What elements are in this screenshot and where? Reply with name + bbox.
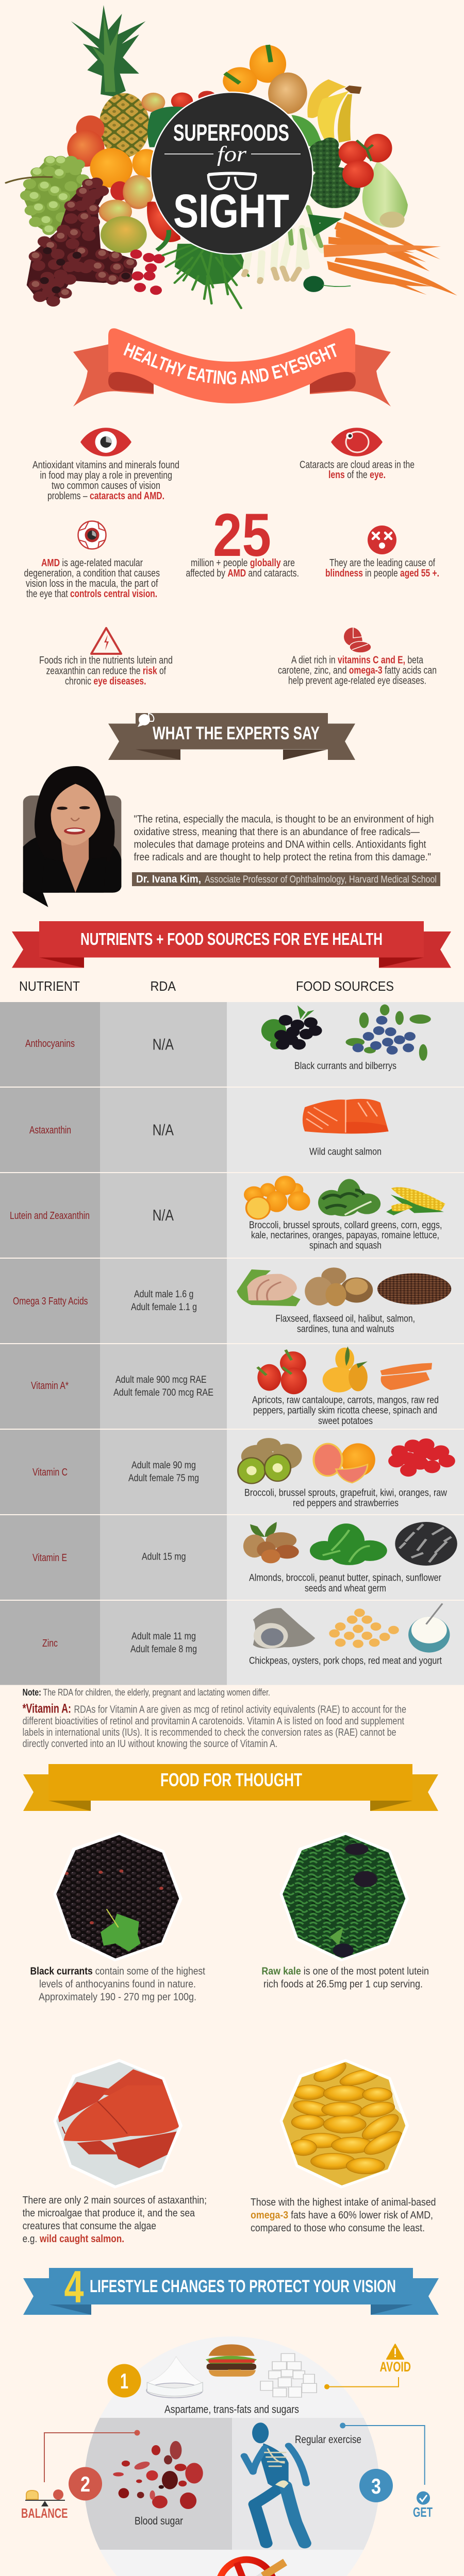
RDA values: Adult male 11 mg bbox=[131, 1631, 196, 1642]
ribbon left fold bbox=[108, 372, 154, 393]
text: omega-3: Those with the highest intake of animal-based bbox=[251, 2197, 436, 2208]
carrots bbox=[323, 212, 457, 296]
icon: check bbox=[417, 2492, 430, 2505]
row: vitamin E bbox=[32, 1522, 457, 1594]
quote text: "The retina, especially the macula, is thought to be an environment of high bbox=[134, 814, 434, 825]
banner folds bbox=[49, 2304, 413, 2315]
banner folds bbox=[136, 749, 328, 760]
label: avoid: AVOID bbox=[379, 2359, 411, 2375]
row: astaxanthin bbox=[29, 1099, 389, 1157]
food caption: Black currants and bilberrys bbox=[294, 1060, 396, 1072]
section 2: balance bbox=[21, 2430, 203, 2527]
text: black currants: levels of anthocyanins found in nature. bbox=[39, 1979, 196, 1990]
food images: oranges, kale, corn bbox=[244, 1176, 445, 1219]
icon: warning triangle bbox=[91, 628, 121, 654]
note: vitamin A: *Vitamin A: bbox=[23, 1701, 71, 1716]
text: global stat bbox=[186, 557, 299, 579]
text: lutein: chronic eye diseases. bbox=[65, 676, 146, 687]
banner folds bbox=[39, 957, 424, 968]
connector bbox=[44, 2430, 140, 2482]
text: AMD: AMD is age-related macular bbox=[41, 557, 143, 569]
RDA value: N/A bbox=[153, 1036, 174, 1053]
text: antioxidants: two common causes of vision bbox=[52, 480, 160, 492]
food caption: seeds and wheat germ bbox=[305, 1583, 386, 1594]
text: salmon: e.g. wild caught salmon. bbox=[23, 2233, 124, 2245]
text: AMD: the eye that controls central vision. bbox=[26, 588, 157, 600]
RDA values: Adult male 1.6 g bbox=[134, 1289, 193, 1300]
text: AMD: vision loss in the macula, the part of bbox=[26, 578, 158, 589]
jacket bbox=[23, 836, 121, 893]
nutrient name: Omega 3 Fatty Acids bbox=[13, 1296, 88, 1307]
middle band bbox=[82, 2418, 382, 2550]
caption: Regular exercise bbox=[295, 2434, 361, 2446]
quote text: free radicals and are thought to help protect the retina from this damage." bbox=[134, 852, 431, 863]
lifestyle circle diagram bbox=[21, 2336, 433, 2576]
pineapple bbox=[71, 5, 150, 158]
attribution box bbox=[132, 872, 440, 886]
panel: omega-3 capsules bbox=[251, 2057, 436, 2234]
banner main bar bbox=[136, 713, 328, 760]
mango and red fruit bbox=[67, 115, 105, 167]
number 1 bbox=[107, 2364, 141, 2398]
caption: Blood sugar bbox=[135, 2515, 183, 2527]
icon: pills bbox=[344, 628, 371, 653]
spinach leaf bbox=[303, 276, 351, 292]
title badge bbox=[151, 92, 312, 254]
text: salmon: the microalgae that produce it, and the sea bbox=[23, 2208, 195, 2219]
banner: food for thought bbox=[23, 1764, 438, 1811]
food caption bbox=[244, 1487, 448, 1509]
text: cataracts: lens of the eye. bbox=[328, 469, 386, 481]
food image: salmon bbox=[303, 1099, 389, 1133]
image: running figure bbox=[244, 2422, 306, 2544]
apples behind bbox=[141, 91, 216, 112]
row: lutein and zeaxanthin bbox=[10, 1176, 445, 1251]
pear bbox=[101, 216, 147, 253]
attribution name: Dr. Ivana Kim, bbox=[136, 873, 201, 885]
image: burger bbox=[206, 2344, 257, 2377]
panel: lutein bbox=[39, 628, 173, 687]
photo: salmon bbox=[53, 2059, 184, 2189]
icon: bloodshot eye bbox=[78, 521, 106, 549]
notes bbox=[23, 1687, 406, 1750]
expert quote bbox=[132, 814, 440, 886]
panel: salmon bbox=[23, 2059, 207, 2245]
table header: food sources: FOOD SOURCES bbox=[296, 978, 394, 994]
onion bbox=[268, 73, 307, 114]
hero: pile of fruit and vegetables bbox=[6, 5, 457, 308]
panel: AMD bbox=[24, 521, 160, 600]
photo: kale bbox=[279, 1832, 410, 1961]
icon: balance scale bbox=[25, 2489, 65, 2506]
speech tail bbox=[23, 882, 59, 907]
nutrient name: Vitamin C bbox=[32, 1467, 68, 1478]
nutrient name: Vitamin A* bbox=[31, 1380, 69, 1392]
photo: black currants bbox=[53, 1832, 184, 1961]
RDA values: Adult female 75 mg bbox=[128, 1472, 199, 1484]
text: black currants: Black currants contain some of the highest bbox=[30, 1966, 205, 1977]
table header: RDA: RDA bbox=[151, 978, 176, 994]
number 2 bbox=[69, 2467, 102, 2501]
note: vitamin A bbox=[23, 1701, 406, 1750]
text: diet: help prevent age-related eye diseases. bbox=[288, 675, 426, 686]
image: aspartame bowl bbox=[146, 2357, 203, 2398]
connector bbox=[324, 2377, 399, 2389]
banner tails bbox=[108, 723, 355, 760]
food caption bbox=[249, 1219, 442, 1251]
text: blindness: They are the leading cause of bbox=[329, 557, 435, 569]
banner: 4 lifestyle changes bbox=[23, 2261, 439, 2315]
banner: nutrients and food sources bbox=[12, 921, 451, 968]
text: global stat: affected by AMD and cataracts. bbox=[186, 568, 299, 579]
photo: capsules bbox=[279, 2057, 410, 2189]
text: raw kale bbox=[261, 1966, 429, 1990]
eyes bbox=[57, 806, 90, 810]
title rule right bbox=[251, 154, 301, 155]
food caption: spinach and squash bbox=[309, 1240, 382, 1251]
food images: peppers, mangos, carrots bbox=[257, 1346, 432, 1394]
image: blood cells bbox=[113, 2441, 203, 2509]
food images: tuna, walnuts, flaxseed bbox=[237, 1267, 451, 1306]
quote text bbox=[134, 814, 434, 863]
text: diet: A diet rich in vitamins C and E, beta bbox=[291, 654, 424, 666]
text: raw kale: Raw kale is one of the most potent lutein bbox=[261, 1966, 429, 1977]
row: vitamin C bbox=[32, 1438, 448, 1509]
red bell pepper bbox=[147, 201, 180, 250]
panel: antioxidants bbox=[32, 428, 179, 502]
RDA values bbox=[131, 1289, 197, 1313]
ribbon right tail bbox=[310, 344, 391, 406]
food caption: sardines, tuna and walnuts bbox=[297, 1324, 394, 1335]
banner folds bbox=[48, 1801, 412, 1811]
panel: blindness bbox=[325, 526, 439, 579]
banner main bar bbox=[49, 2268, 413, 2304]
food caption: Flaxseed, flaxseed oil, halibut, salmon, bbox=[275, 1313, 415, 1325]
text: global stat: million + people globally are bbox=[191, 557, 295, 569]
RDA values: Adult male 90 mg bbox=[131, 1460, 196, 1471]
nutrient name: Lutein and Zeaxanthin bbox=[10, 1210, 90, 1222]
raspberries bbox=[136, 254, 159, 290]
RDA values bbox=[113, 1374, 213, 1398]
nutrient name: Zinc bbox=[42, 1638, 58, 1649]
text: AMD: degeneration, a condition that causes bbox=[24, 568, 160, 579]
section 4: quit smoking bbox=[89, 2560, 334, 2576]
text: antioxidants: problems – cataracts and AMD. bbox=[47, 490, 164, 502]
banner title: WHAT THE EXPERTS SAY bbox=[153, 723, 320, 743]
RDA values bbox=[130, 1631, 197, 1655]
red grapes bbox=[27, 179, 136, 303]
ribbon left tail bbox=[73, 344, 154, 406]
nose shadow bbox=[71, 818, 79, 821]
food images: currants and bilberries bbox=[261, 1005, 431, 1061]
table backgrounds bbox=[0, 1002, 464, 1685]
number 1: 1 bbox=[120, 2369, 128, 2393]
celery bbox=[362, 161, 408, 228]
icon: glasses bbox=[208, 173, 256, 189]
text: omega-3: compared to those who consume the least. bbox=[251, 2223, 425, 2234]
text: omega-3: omega-3 fats have a 60% lower risk of AMD, bbox=[251, 2210, 433, 2221]
panel: diet bbox=[278, 628, 437, 686]
ribbon: healthy eating and eyesight bbox=[73, 328, 391, 406]
text: lutein: Foods rich in the nutrients lutein and bbox=[39, 655, 173, 666]
RDA value: Adult 15 mg bbox=[142, 1551, 186, 1563]
title: superfoods: SUPERFOODS bbox=[173, 120, 289, 146]
ribbon title: HEALTHY EATING AND EYESIGHT bbox=[123, 343, 337, 384]
banner title: FOOD FOR THOUGHT bbox=[160, 1769, 302, 1790]
row: anthocyanins bbox=[25, 1005, 431, 1072]
section 1: avoid bbox=[107, 2344, 411, 2415]
ribbon main band bbox=[108, 328, 355, 403]
quote text: oxidative stress, meaning that there is an abundance of free radicals— bbox=[134, 826, 420, 838]
panel: black currants bbox=[30, 1832, 205, 2003]
broccoli bbox=[307, 138, 360, 208]
food images: kiwi, grapefruit, strawberries bbox=[238, 1438, 447, 1483]
collar bbox=[41, 857, 107, 893]
connector bbox=[340, 2422, 425, 2485]
title: for: for bbox=[217, 143, 247, 166]
text: diet: carotene, zinc, and omega-3 fatty acids can bbox=[278, 665, 437, 676]
stat: 25 million bbox=[186, 501, 299, 579]
neck bbox=[61, 836, 89, 893]
text: antioxidants bbox=[32, 460, 179, 502]
text: antioxidants: in food may play a role in preventing bbox=[40, 470, 172, 481]
RDA values bbox=[128, 1460, 199, 1484]
text: black currants: Approximately 190 - 270 mg per 100g. bbox=[39, 1992, 196, 2003]
icon: speech bubbles bbox=[138, 714, 154, 727]
icon: face bbox=[368, 526, 396, 554]
nutrient name: Anthocyanins bbox=[25, 1038, 75, 1049]
number 3 bbox=[359, 2469, 393, 2502]
text: cataracts: Cataracts are cloud areas in the bbox=[300, 460, 415, 471]
photo backdrop bbox=[23, 795, 121, 893]
face bbox=[51, 784, 101, 845]
food images: oyster, chickpeas, yogurt bbox=[253, 1603, 450, 1653]
spring onions bbox=[244, 207, 332, 282]
text: lutein: zeaxanthin can reduce the risk of bbox=[46, 666, 166, 677]
banner: what the experts say bbox=[108, 713, 355, 760]
icon: eye with lens bbox=[331, 428, 383, 456]
text: diet bbox=[278, 654, 437, 686]
banner main bar bbox=[48, 1764, 412, 1801]
icon: no smoking bbox=[211, 2560, 285, 2576]
food caption bbox=[275, 1313, 415, 1335]
text: blindness bbox=[325, 557, 439, 579]
RDA value: N/A bbox=[153, 1206, 174, 1224]
title: sight: SIGHT bbox=[173, 185, 289, 238]
badge circle bbox=[151, 92, 312, 254]
RDA value: N/A bbox=[153, 1121, 174, 1139]
RDA values: Adult male 900 mcg RAE bbox=[115, 1374, 207, 1385]
banner tails bbox=[23, 1774, 438, 1811]
icon: eye bbox=[80, 428, 131, 456]
spinach leaves bbox=[147, 107, 321, 147]
banner tails bbox=[23, 2278, 439, 2315]
banner tails bbox=[12, 931, 451, 968]
quote text: molecules that damage proteins and DNA within cells. Antioxidants fight bbox=[134, 839, 426, 850]
text: cataracts bbox=[300, 460, 415, 481]
number 3: 3 bbox=[371, 2474, 381, 2498]
tomatoes bbox=[339, 134, 392, 188]
text: antioxidants: Antioxidant vitamins and minerals found bbox=[32, 460, 179, 471]
food caption bbox=[249, 1572, 441, 1594]
text: salmon bbox=[23, 2195, 207, 2245]
ribbon right fold bbox=[310, 372, 356, 393]
note: vitamin A: directly converted into an IU without knowing the source of Vitamin A. bbox=[23, 1738, 277, 1750]
big number 25: 25 bbox=[213, 501, 271, 569]
number 2: 2 bbox=[80, 2472, 90, 2496]
oranges bbox=[90, 148, 161, 188]
table header: nutrient: NUTRIENT bbox=[19, 978, 80, 994]
text: raw kale: rich foods at 26.5mg per 1 cup serving. bbox=[263, 1979, 423, 1990]
text: blindness: blindness in people aged 55 +. bbox=[325, 568, 439, 579]
RDA values: Adult female 700 mcg RAE bbox=[113, 1387, 213, 1398]
big number 4: 4 bbox=[64, 2261, 84, 2312]
text: salmon: creatures that consume the algae bbox=[23, 2221, 156, 2232]
section 3: get exercise bbox=[244, 2422, 433, 2544]
apples in front bbox=[99, 175, 154, 224]
lettuce bbox=[291, 115, 322, 147]
nutrient name: Astaxanthin bbox=[29, 1125, 71, 1136]
hair bbox=[35, 766, 115, 861]
food caption: red peppers and strawberries bbox=[293, 1498, 399, 1509]
RDA values: Adult female 1.1 g bbox=[131, 1301, 197, 1313]
label: get: GET bbox=[413, 2504, 433, 2520]
RDA values: Adult female 8 mg bbox=[130, 1643, 197, 1655]
text: salmon: There are only 2 main sources of astaxanthin; bbox=[23, 2195, 207, 2206]
bananas bbox=[307, 79, 361, 144]
orange peppers bbox=[223, 45, 286, 95]
row: zinc bbox=[42, 1603, 450, 1666]
food images: almonds, spinach, sunflower seeds bbox=[243, 1522, 457, 1566]
text: omega-3 bbox=[251, 2197, 436, 2234]
label: balance: BALANCE bbox=[21, 2505, 68, 2521]
green grapes bbox=[6, 159, 83, 234]
panel: cataracts bbox=[300, 428, 415, 481]
title rule left bbox=[164, 154, 213, 155]
text: lutein bbox=[39, 655, 173, 687]
row: omega 3 bbox=[13, 1267, 451, 1335]
banner main bar bbox=[39, 921, 424, 957]
text: black currants bbox=[30, 1966, 205, 2003]
icon: warning bbox=[387, 2344, 404, 2359]
circle background bbox=[85, 2336, 379, 2576]
nutrient name: Vitamin E bbox=[32, 1552, 67, 1564]
food caption: Wild caught salmon bbox=[309, 1146, 382, 1157]
note: RDA: Note: The RDA for children, the elderly, pregnant and lactating women differ. bbox=[23, 1687, 270, 1698]
caption: Aspartame, trans-fats and sugars bbox=[164, 2404, 299, 2415]
carrot tops bbox=[163, 244, 248, 308]
text: AMD bbox=[24, 557, 160, 600]
image: sugar cubes bbox=[260, 2353, 317, 2397]
food caption: sweet potatoes bbox=[318, 1415, 373, 1427]
mouth bbox=[64, 827, 85, 835]
row: vitamin A bbox=[31, 1346, 439, 1427]
food caption bbox=[252, 1395, 439, 1427]
panel: raw kale bbox=[261, 1832, 429, 1990]
expert photo: Dr. Ivana Kim bbox=[23, 766, 121, 907]
